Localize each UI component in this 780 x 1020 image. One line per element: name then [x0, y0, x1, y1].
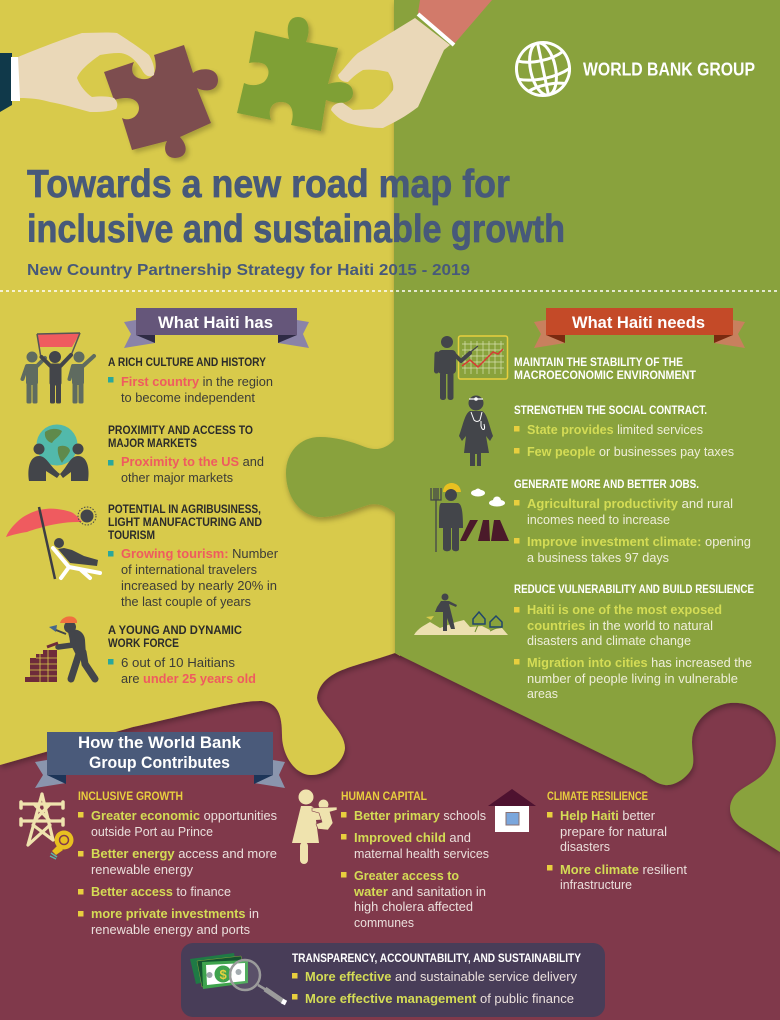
icon: farmer and field [431, 483, 509, 552]
bullet text: Better energy access and more [91, 846, 277, 861]
title: Towards a new road map for [27, 163, 510, 206]
heading [108, 502, 262, 542]
heading [108, 623, 242, 650]
heading [514, 355, 697, 382]
bullet text: maternal health services [354, 846, 489, 861]
bullet text: Greater access to [354, 868, 459, 883]
item: culture and history [22, 333, 273, 405]
item: young work force [25, 616, 256, 686]
banner: how the World Bank Group contributes [35, 732, 285, 788]
bullet text: State provides limited services [527, 422, 703, 437]
bullet text: other major markets [121, 470, 233, 485]
item: vulnerability [414, 582, 754, 701]
bullet text: to become independent [121, 390, 255, 405]
item: jobs [431, 477, 751, 565]
title: inclusive and sustainable growth [27, 208, 565, 251]
item: macroeconomic stability [436, 336, 697, 400]
bullet text: Agricultural productivity and rural [527, 496, 733, 511]
background: yellow puzzle piece [0, 0, 400, 775]
bullet text [547, 808, 687, 892]
bullet text: high cholera affected [354, 899, 473, 914]
background: green puzzle piece [286, 0, 780, 852]
heading [108, 423, 253, 450]
column: human capital [292, 789, 489, 930]
bullet text: 6 out of 10 Haitians [121, 655, 235, 670]
heading: HUMAN CAPITAL [341, 789, 427, 803]
icon: people with flag [22, 333, 94, 403]
right hand [331, 18, 450, 128]
left sleeve [0, 53, 12, 112]
icon: globe [511, 37, 575, 101]
banner: how the World Bank Group contributes: Group Contributes [89, 754, 230, 772]
bullet text: renewable energy and ports [91, 922, 250, 937]
bullet text: More effective management of public finance [305, 991, 574, 1006]
bullet text: prepare for natural [560, 824, 667, 839]
bullet text: a business takes 97 days [527, 550, 669, 565]
bullet text: Better primary schools [354, 808, 486, 823]
banner: how the World Bank Group contributes: How the World Bank [78, 734, 242, 752]
banner: what Haiti has [124, 308, 309, 348]
bullet text: water and sanitation in [353, 884, 486, 899]
bullet text: Migration into cities has increased the [527, 655, 752, 670]
bullet text: are under 25 years old [121, 671, 256, 686]
panel: how the World Bank Group contributes [21, 732, 687, 1017]
bullet text: disasters [560, 839, 610, 854]
bullet text [108, 655, 256, 686]
bullet text: communes [354, 915, 414, 930]
bullet text: number of people living in vulnerable [527, 671, 738, 686]
heading: TOURISM [108, 528, 155, 542]
banner: what Haiti needs [534, 308, 745, 348]
bullet text: Better access to finance [91, 884, 231, 899]
heading: MAJOR MARKETS [108, 436, 197, 450]
bullet text: disasters and climate change [527, 633, 691, 648]
heading: MAINTAIN THE STABILITY OF THE [514, 355, 683, 369]
bullet text: incomes need to increase [527, 512, 670, 527]
right cuff [418, 14, 454, 45]
bullet text: increased by nearly 20% in [121, 578, 277, 593]
item: proximity to markets [28, 423, 264, 485]
panel: what Haiti has [6, 308, 309, 686]
bullet text: Greater economic opportunities [91, 808, 277, 823]
bullet text [514, 422, 734, 459]
bullet text: the last couple of years [121, 594, 251, 609]
icon: doctor [459, 396, 493, 466]
left hand [18, 33, 154, 112]
panel: transparency, accountability, sustainability [181, 943, 605, 1017]
heading: GENERATE MORE AND BETTER JOBS. [514, 477, 699, 491]
icon: globe and handshake [28, 424, 89, 481]
bullet text [292, 969, 578, 1006]
heading: WORK FORCE [108, 636, 179, 650]
bullet text: Improved child and [354, 830, 471, 845]
bullet text: of international travelers [121, 562, 257, 577]
bullet text: More climate resilient [560, 862, 687, 877]
bullet text: Improve investment climate: opening [527, 534, 751, 549]
panel: what Haiti needs [414, 308, 754, 701]
bullet text: infrastructure [560, 877, 632, 892]
heading: A RICH CULTURE AND HISTORY [108, 355, 266, 369]
column: inclusive growth [21, 789, 277, 937]
bullet text: Few people or businesses pay taxes [527, 444, 734, 459]
bullet text: Haiti is one of the most exposed [527, 602, 722, 617]
green puzzle piece [237, 17, 353, 131]
bullet text: Proximity to the US and [121, 454, 264, 469]
icon: house [488, 789, 536, 832]
heading: CLIMATE RESILIENCE [547, 789, 648, 803]
bullet text: renewable energy [91, 862, 194, 877]
bullet text [78, 808, 277, 937]
brown puzzle piece [104, 45, 218, 158]
heading: LIGHT MANUFACTURING AND [108, 515, 262, 529]
subtitle: New Country Partnership Strategy for Haiti 2015 - 2019 [27, 262, 470, 279]
icon: presenter with chart [436, 336, 508, 400]
item: agribusiness and tourism [6, 502, 279, 609]
heading: PROXIMITY AND ACCESS TO [108, 423, 253, 437]
heading: STRENGTHEN THE SOCIAL CONTRACT. [514, 403, 707, 417]
bullet text: countries in the world to natural [527, 618, 713, 633]
bullet text: Growing tourism: Number [121, 546, 279, 561]
title [27, 163, 565, 251]
logo: World Bank Group [511, 37, 755, 101]
banner: what Haiti needs: What Haiti needs [572, 314, 705, 332]
bullet text [514, 496, 751, 565]
heading: POTENTIAL IN AGRIBUSINESS, [108, 502, 261, 516]
icon: beach umbrella and lounger [6, 507, 100, 579]
icon: earthquake scene [414, 594, 508, 635]
icon: money under magnifying glass [190, 953, 286, 1003]
bullet text: outside Port au Prince [91, 824, 213, 839]
heading: A YOUNG AND DYNAMIC [108, 623, 242, 637]
bullet text [108, 454, 264, 485]
bullet text [108, 374, 273, 405]
icon: bricklayer [25, 616, 95, 682]
icon: mother and child [292, 790, 337, 864]
right sleeve [418, 0, 492, 43]
banner: what Haiti has: What Haiti has [158, 314, 273, 332]
bullet text: More effective and sustainable service delivery [305, 969, 578, 984]
bullet text [514, 602, 752, 701]
bullet text [341, 808, 489, 930]
item: social contract [459, 396, 734, 466]
column: climate resilience [547, 789, 687, 892]
bullet text [108, 546, 279, 609]
icon: money under magnifying glass: $ [220, 967, 228, 982]
heading: INCLUSIVE GROWTH [78, 789, 183, 803]
heading: MACROECONOMIC ENVIRONMENT [514, 368, 697, 382]
illustration: hands joining puzzle pieces [0, 0, 492, 158]
bullet text: Help Haiti better [560, 808, 656, 823]
left cuff [11, 57, 20, 101]
bullet text: First country in the region [121, 374, 273, 389]
heading: TRANSPARENCY, ACCOUNTABILITY, AND SUSTAINABILITY [292, 951, 581, 965]
logo text: WORLD BANK GROUP [583, 58, 755, 80]
icon: power tower and bulb [21, 794, 74, 859]
bullet text: more private investments in [91, 906, 259, 921]
bullet text: areas [527, 686, 558, 701]
